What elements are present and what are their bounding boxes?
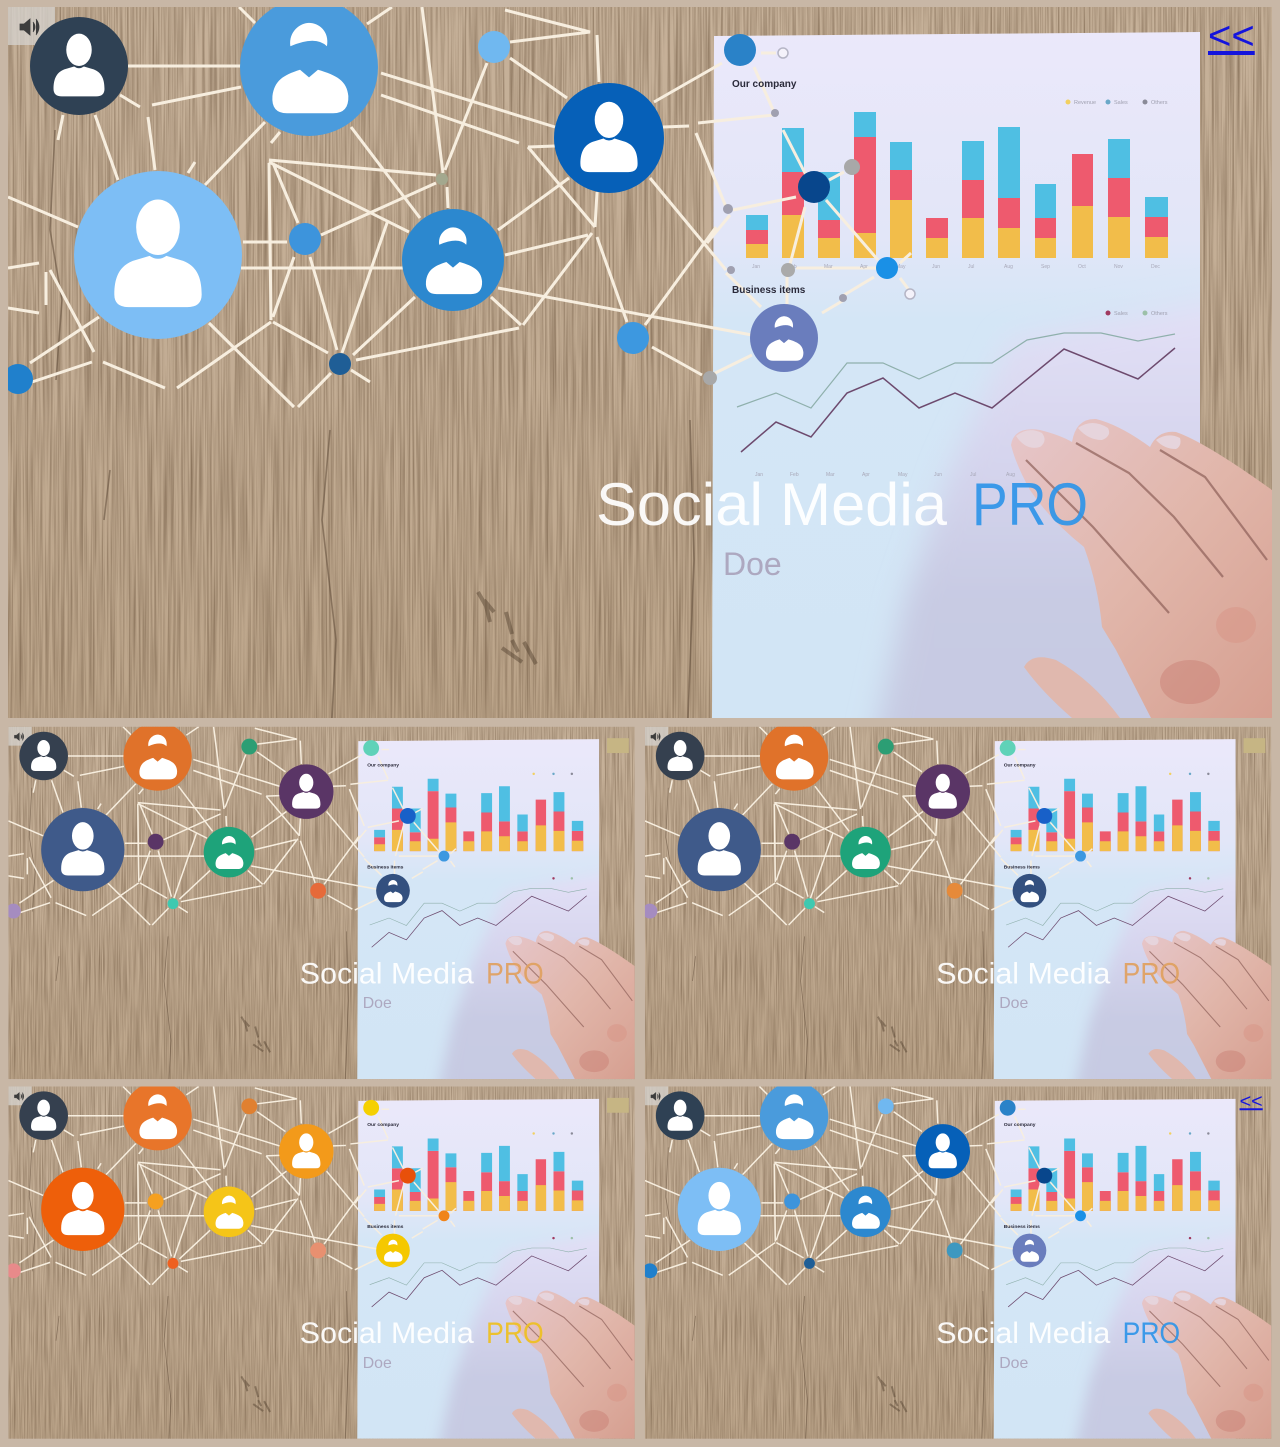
- chart headings: Our company: [367, 762, 399, 768]
- avatar: purple man: [916, 764, 970, 819]
- avatar: mid blue woman: [840, 1187, 891, 1237]
- avatar: blue woman: [760, 1082, 828, 1150]
- chart headings and labels: Mar: [826, 472, 835, 478]
- title: PRO: [486, 957, 544, 990]
- subtitle: Doe: [999, 995, 1028, 1012]
- avatar: green woman: [204, 827, 254, 877]
- photo background: [645, 1086, 1271, 1447]
- network nodes: [642, 738, 1265, 919]
- avatar: dark man: [19, 732, 68, 780]
- avatar: light blue man: [678, 1168, 761, 1251]
- avatar: periwinkle woman on paper: [750, 304, 818, 372]
- chart headings: Business items: [367, 1224, 404, 1230]
- title: Social Media: [936, 1317, 1111, 1350]
- avatar: deep blue man: [916, 1124, 970, 1179]
- photo background: [645, 727, 1271, 1100]
- chart headings and labels: Jul: [970, 472, 976, 478]
- title: [936, 957, 1180, 990]
- chart headings and labels: Mar: [824, 264, 833, 270]
- chart headings: Our company: [367, 1122, 399, 1128]
- chart headings: Our company: [1004, 1122, 1036, 1128]
- chart headings and labels: Feb: [790, 472, 799, 478]
- network nodes: [6, 1098, 629, 1278]
- subtitle: Doe: [363, 995, 392, 1012]
- chart headings and labels: Oct: [1078, 264, 1086, 270]
- title: Social Media: [300, 1317, 474, 1350]
- avatar: dark man: [656, 732, 704, 780]
- title: Social Media: [936, 957, 1111, 990]
- chart headings and labels: Business items: [732, 285, 806, 296]
- chart headings and labels: Our company: [732, 79, 797, 90]
- photo background with paper, charts, hand and network lines: [8, 7, 1272, 760]
- chart headings and labels: Sales: [1114, 100, 1128, 106]
- chart headings and labels: Jul: [968, 264, 974, 270]
- title: Social Media: [596, 471, 948, 538]
- photo background: [8, 1086, 635, 1447]
- title: [936, 1317, 1180, 1350]
- avatar: yellow woman: [204, 1187, 254, 1237]
- avatar: bright orange man: [41, 1168, 124, 1251]
- panel: small slide, navy and orange theme copy: [642, 722, 1271, 1100]
- title: PRO: [972, 471, 1088, 538]
- chart headings and labels: May: [896, 264, 906, 270]
- chart headings: Business items: [1004, 864, 1040, 870]
- avatar: mid blue woman: [402, 209, 504, 311]
- chart headings and labels: Jan: [752, 264, 760, 270]
- title: PRO: [1123, 1317, 1180, 1350]
- title: [300, 1317, 544, 1350]
- chart headings and labels: Aug: [1006, 472, 1015, 478]
- chart headings: [367, 1122, 404, 1230]
- chart headings and labels: Jun: [932, 264, 940, 270]
- title: [598, 482, 1086, 526]
- chart headings and labels: Revenue: [1074, 100, 1096, 106]
- avatar: navy woman on paper: [1013, 874, 1046, 908]
- chart headings and labels: Sep: [1041, 264, 1050, 270]
- subtitle: Doe: [723, 546, 782, 582]
- avatar: periwinkle woman on paper: [1013, 1234, 1046, 1267]
- chart headings and labels: Dec: [1151, 264, 1160, 270]
- chart headings: Our company: [1004, 762, 1036, 768]
- chart headings and labels: Apr: [862, 472, 870, 478]
- avatar: dark man: [30, 17, 128, 115]
- panel: small slide, orange and yellow theme: [6, 1082, 635, 1447]
- chart headings and labels: Jan: [755, 472, 763, 478]
- avatar: purple man: [279, 764, 334, 819]
- chart headings and labels: Aug: [1004, 264, 1013, 270]
- chart headings and labels: [732, 79, 1168, 478]
- panel: small slide, navy and orange theme: [6, 722, 635, 1100]
- avatar: deep blue man: [554, 83, 664, 193]
- panel: small slide, blue theme: [642, 1082, 1271, 1447]
- chart headings and labels: Others: [1151, 100, 1168, 106]
- network nodes: [642, 1098, 1086, 1278]
- avatar: navy man: [41, 808, 124, 891]
- network nodes: [6, 738, 629, 919]
- avatar: yellow woman on paper: [376, 1234, 410, 1267]
- avatar: green woman: [840, 827, 891, 877]
- title: Social Media: [300, 957, 474, 990]
- avatar: dark man: [656, 1091, 704, 1140]
- chart headings: Business items: [367, 864, 404, 870]
- chart headings and labels: Apr: [860, 264, 868, 270]
- avatar: orange woman: [760, 722, 828, 791]
- photo background: [8, 727, 635, 1100]
- chart headings and labels: Sales: [1114, 311, 1128, 317]
- panel: main slide: [3, 0, 1272, 760]
- back link: <<: [1208, 14, 1255, 58]
- avatar: blue woman: [240, 0, 378, 136]
- chart headings and labels: Others: [1151, 311, 1168, 317]
- avatar: orange woman: [123, 1082, 192, 1150]
- chart headings and labels: May: [898, 472, 908, 478]
- chart headings: [367, 762, 404, 870]
- chart headings: Business items: [1004, 1224, 1040, 1230]
- chart headings: [1004, 1122, 1040, 1230]
- chart headings and labels: Jun: [934, 472, 942, 478]
- avatar: dark man: [19, 1091, 68, 1140]
- subtitle: Doe: [363, 1355, 392, 1372]
- chart headings: [1004, 762, 1040, 870]
- chart headings and labels: Nov: [1114, 264, 1123, 270]
- chart headings and labels: Feb: [788, 264, 797, 270]
- avatar: light blue man: [74, 171, 242, 339]
- network nodes: [3, 31, 915, 394]
- subtitle: Doe: [999, 1355, 1028, 1372]
- avatar: amber man: [279, 1124, 334, 1179]
- title: PRO: [1123, 957, 1180, 990]
- back link: <<: [1240, 1090, 1263, 1112]
- title: [300, 957, 544, 990]
- title: PRO: [486, 1317, 544, 1350]
- avatar: orange woman: [123, 722, 192, 791]
- avatar: navy woman on paper: [376, 874, 410, 908]
- avatar: navy man: [678, 808, 761, 891]
